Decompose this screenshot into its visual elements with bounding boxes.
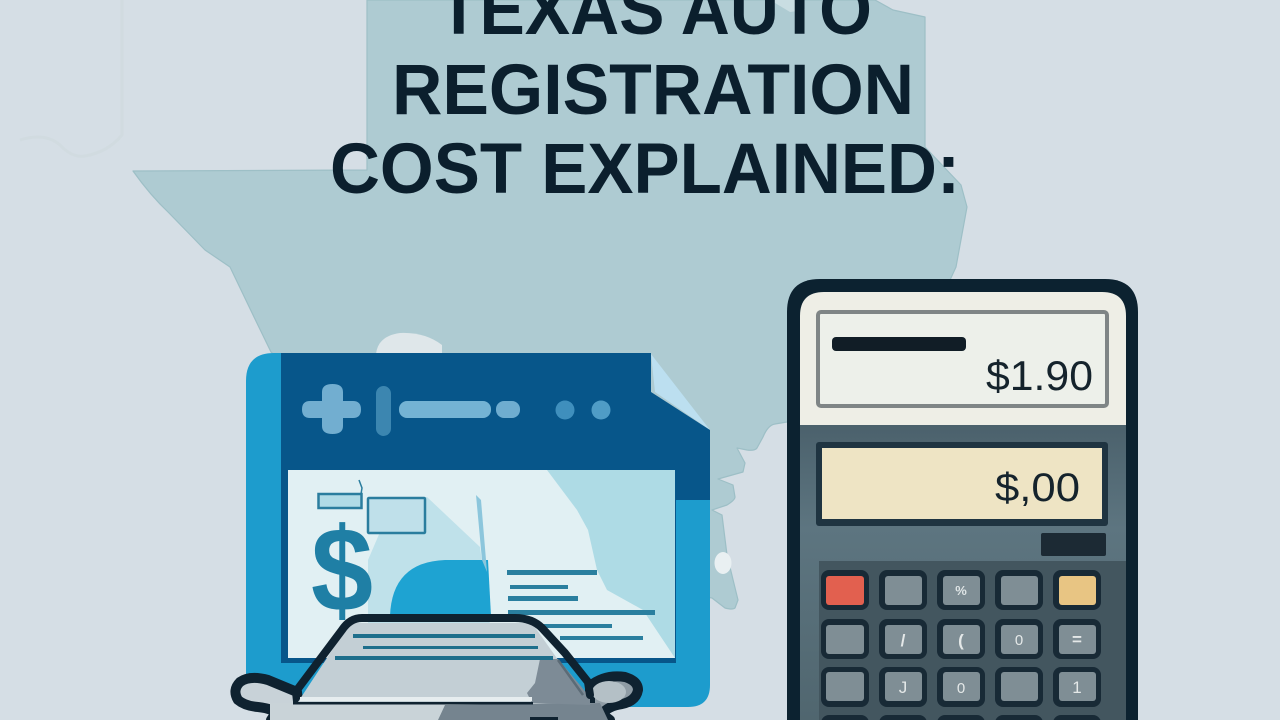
header plus icon — [302, 384, 361, 434]
panel blue semicircle — [390, 560, 491, 616]
key row 1: % — [955, 583, 967, 598]
key row 2: / — [901, 631, 906, 650]
document folded corner — [651, 354, 710, 430]
document blue backing — [246, 353, 710, 707]
header symbols — [302, 384, 610, 436]
title — [330, 0, 960, 209]
header dot one — [556, 400, 574, 420]
key row 2: ( — [958, 631, 964, 650]
document inner panel — [288, 470, 675, 658]
key row 3: J — [899, 678, 907, 697]
receipt screen — [818, 312, 1107, 406]
car right mirror — [590, 676, 638, 720]
car windshield shadow — [527, 659, 590, 705]
dollar sign: $ — [311, 503, 373, 637]
panel text lines — [507, 570, 655, 640]
keypad — [819, 561, 1126, 720]
panel base — [288, 470, 675, 658]
calculator slate face — [800, 425, 1126, 720]
calculator cream top — [800, 292, 1126, 425]
car windshield highlight — [300, 697, 532, 701]
header dot two — [592, 400, 610, 420]
key row 2: = — [1072, 630, 1082, 649]
title line 3: COST EXPLAINED: — [330, 130, 960, 209]
receipt amount: $1.90 — [986, 352, 1093, 399]
key row 1 — [821, 570, 1101, 610]
document dark header — [281, 353, 710, 663]
car pillar highlight — [558, 660, 583, 695]
panel sliver — [476, 495, 487, 572]
icon: car — [235, 618, 638, 720]
car lower body — [270, 703, 606, 720]
car body shadow — [438, 703, 608, 720]
header short pill — [496, 401, 520, 418]
key row 3: 1 — [1072, 678, 1082, 697]
key row 2 — [821, 619, 1101, 659]
solar panel — [1041, 533, 1106, 556]
map: light scrap behind title — [770, 0, 805, 12]
key row 3 — [821, 667, 1101, 707]
car windshield lines — [335, 634, 553, 660]
lcd surface — [822, 448, 1102, 519]
lcd amount: $,00 — [995, 466, 1080, 510]
receipt bar — [832, 337, 966, 351]
panel larger rectangle — [368, 498, 425, 533]
car grille hint — [530, 717, 558, 720]
keypad background — [819, 561, 1126, 720]
receipt frame — [818, 312, 1107, 406]
map: bay hole — [714, 552, 732, 574]
car windshield — [298, 623, 585, 702]
car left mirror — [235, 678, 300, 720]
lcd screen — [816, 442, 1108, 526]
faint ghost state outline — [20, 0, 122, 156]
icon: registration document — [246, 353, 710, 707]
panel small rectangle — [318, 494, 362, 508]
icon: calculator — [787, 279, 1138, 720]
car roof outline — [297, 618, 590, 695]
header vertical bar — [376, 386, 391, 436]
car hood line — [293, 702, 533, 704]
calculator body — [787, 279, 1138, 720]
key row 4 — [821, 715, 1101, 720]
lcd frame — [816, 442, 1108, 526]
title line 2: REGISTRATION — [392, 51, 914, 130]
key row 2: 0 — [1015, 632, 1023, 649]
car mirror glass — [592, 681, 626, 703]
panel rectangle tick — [359, 480, 362, 494]
panel light wedge — [368, 497, 490, 625]
map: northern notch — [376, 333, 442, 354]
key row 3: 0 — [957, 680, 965, 697]
map: Texas silhouette — [133, 0, 967, 609]
panel teal map area — [547, 470, 675, 658]
header long pill — [399, 401, 491, 418]
